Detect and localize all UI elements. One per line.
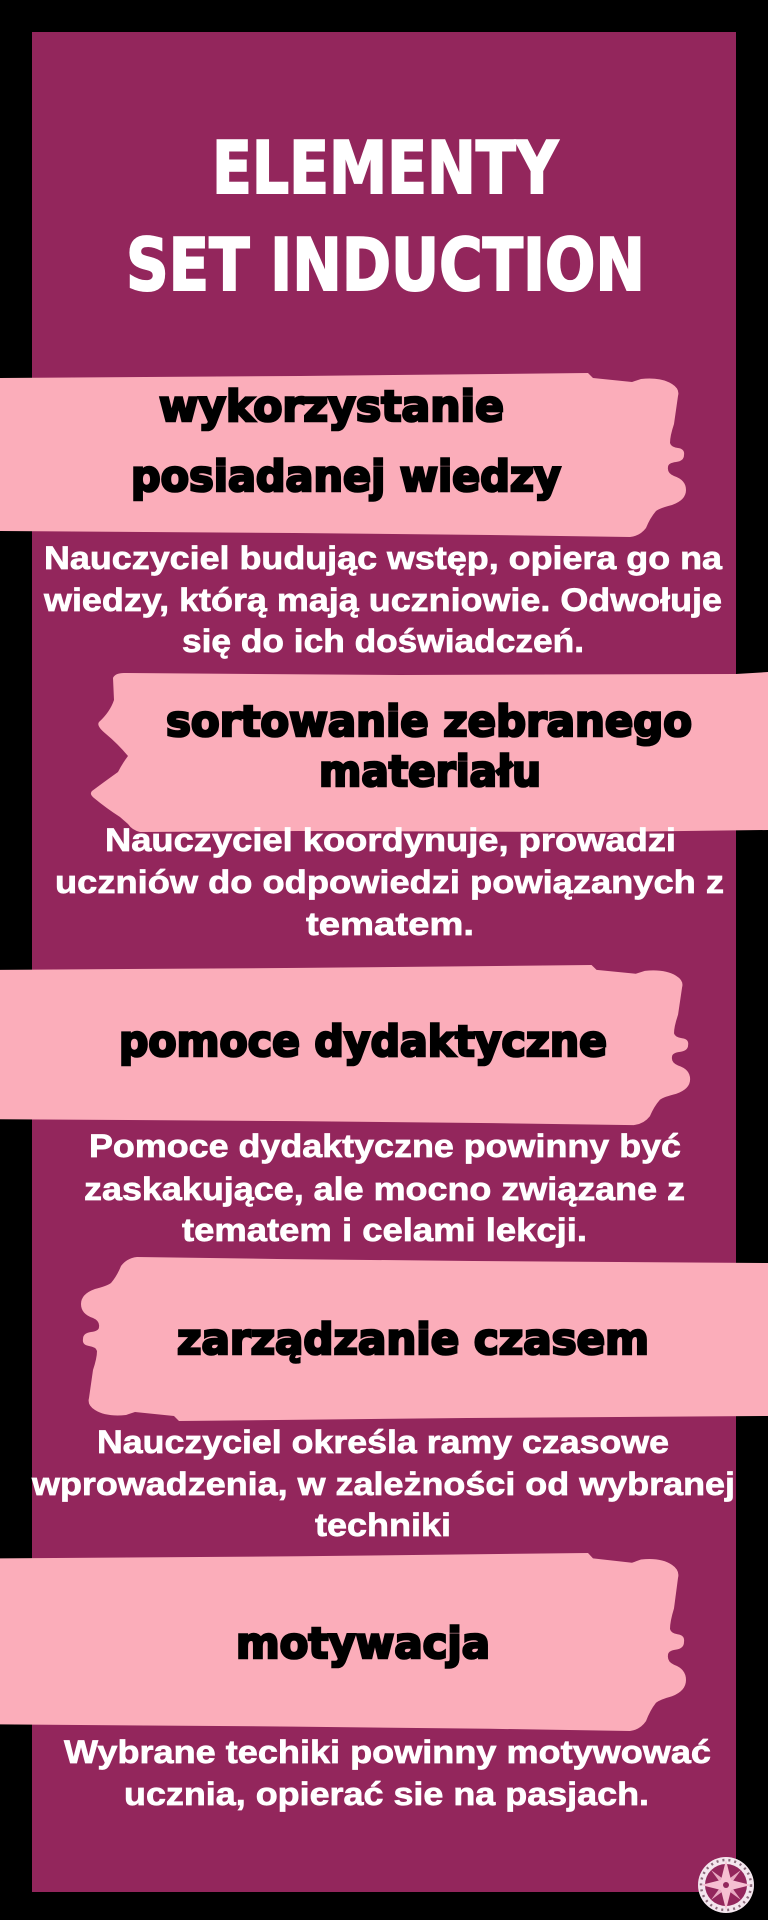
text block: section 1: wiedzy, którą mają uczniowie. Odwołuje	[43, 582, 722, 618]
text block: section 3	[84, 1128, 685, 1248]
text block: section 5	[64, 1734, 711, 1812]
text block: section 2: tematem.	[306, 906, 474, 942]
text block: section 1: się do ich doświadczeń.	[182, 623, 584, 659]
text block: section 5: ucznia, opierać sie na pasjach.	[124, 1776, 649, 1812]
icon: compass logo	[698, 1857, 754, 1913]
heading: sortowanie zebranego: sortowanie zebranego	[166, 697, 692, 747]
banner: wykorzystanie posiadanej wiedzy	[0, 373, 686, 537]
banner: pomoce dydaktyczne	[0, 965, 690, 1125]
banner: zarządzanie czasem	[81, 1257, 768, 1421]
heading: posiadanej wiedzy: posiadanej wiedzy	[131, 452, 561, 502]
text block: section 4: Nauczyciel określa ramy czasowe	[97, 1424, 669, 1460]
text block: section 3: Pomoce dydaktyczne powinny być	[89, 1128, 681, 1164]
heading: pomoce dydaktyczne: pomoce dydaktyczne	[119, 1017, 607, 1067]
heading: materiału: materiału	[319, 747, 541, 797]
text block: section 1: Nauczyciel budując wstęp, opiera go na	[44, 540, 722, 576]
text block: section 4	[31, 1424, 735, 1543]
text block: section 2: uczniów do odpowiedzi powiązanych z	[55, 864, 724, 900]
text block: section 1	[43, 540, 722, 659]
banner: motywacja	[0, 1553, 686, 1731]
text block: section 4: techniki	[315, 1507, 451, 1543]
banner: sortowanie zebranego materiału	[91, 672, 768, 832]
text block: section 3: zaskakujące, ale mocno związane z	[84, 1171, 685, 1207]
text block: section 2	[55, 822, 724, 942]
heading: motywacja: motywacja	[236, 1619, 490, 1669]
text block: section 2: Nauczyciel koordynuje, prowadzi	[105, 822, 676, 858]
title: ELEMENTY	[212, 126, 559, 210]
title	[126, 126, 645, 307]
heading: zarządzanie czasem: zarządzanie czasem	[177, 1315, 649, 1365]
heading: wykorzystanie: wykorzystanie	[159, 382, 504, 432]
title: SET INDUCTION	[126, 223, 645, 307]
text block: section 3: tematem i celami lekcji.	[182, 1212, 587, 1248]
text block: section 4: wprowadzenia, w zależności od wybranej	[31, 1466, 735, 1502]
text block: section 5: Wybrane techiki powinny motywować	[64, 1734, 711, 1770]
